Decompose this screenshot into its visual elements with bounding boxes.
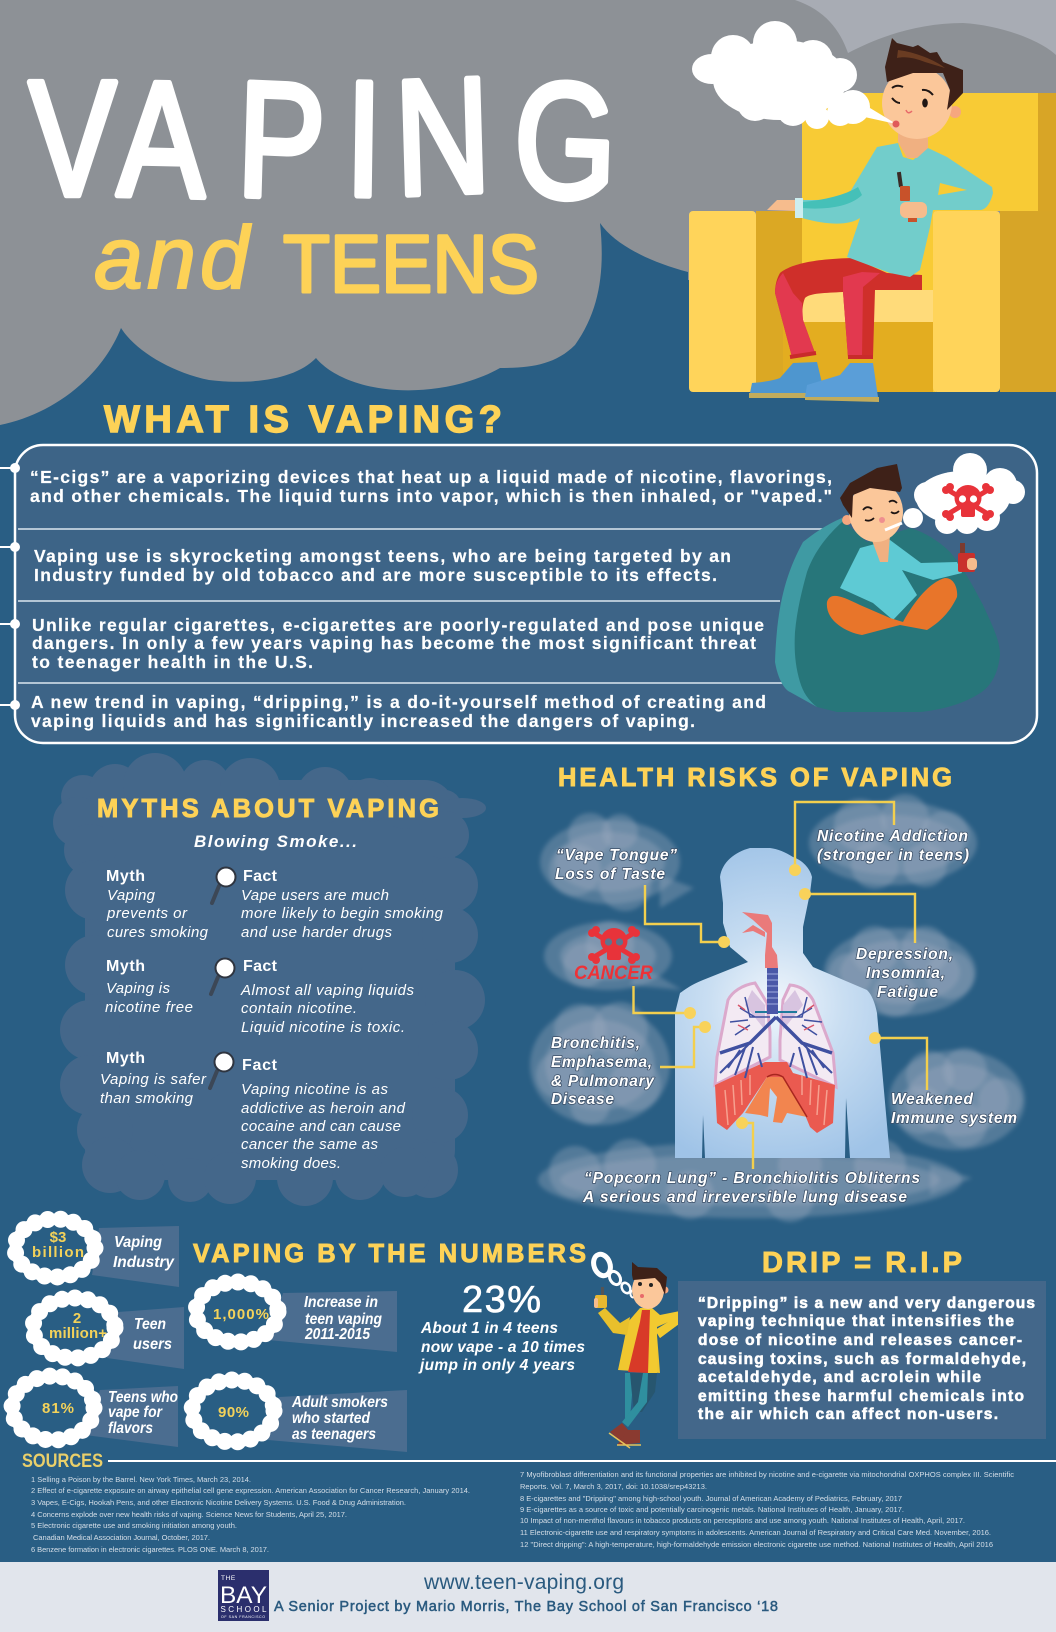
- label: depression: Depression,: [856, 946, 953, 963]
- diaphragm: [715, 1062, 835, 1133]
- myth and fact 2: Myth: [106, 958, 145, 975]
- myth and fact 3: addictive as heroin and: [241, 1100, 406, 1117]
- dripping text: “Dripping” is a new and very dangerous: [698, 1295, 1035, 1312]
- stat: 90 percent: who started: [292, 1410, 370, 1427]
- smoke clouds: [530, 794, 1025, 1222]
- text: poorly regulated: [32, 615, 764, 672]
- label: nicotine addiction: [817, 828, 969, 864]
- sources left column: 6 Benzene formation in electronic cigarettes. PLOS ONE. March 8, 2017.: [31, 1545, 269, 1554]
- stat: 2 million: million+: [49, 1325, 107, 1342]
- text: dripping trend: vaping liquids and has significantly increased the dangers of vaping.: [31, 711, 695, 731]
- label: weakened immune system: Weakened: [891, 1091, 974, 1108]
- myth and fact 3: than smoking: [100, 1090, 194, 1107]
- myth and fact 1: more likely to begin smoking: [241, 905, 444, 922]
- head: [632, 1262, 668, 1309]
- hand and neck: [767, 130, 928, 211]
- human body silhouette: [675, 848, 890, 1158]
- dripping text: [698, 1295, 1035, 1423]
- timeline connectors: [0, 464, 825, 709]
- cloud: weakened: [889, 1048, 1025, 1150]
- icon: magnifier: [210, 1052, 234, 1088]
- credit: A Senior Project by Mario Morris, The Bay School of San Francisco ‘18: [274, 1599, 778, 1615]
- illustration: teen on beanbag: [775, 453, 1025, 712]
- sources right column: 12 "Direct dripping": A high-temperature, high-formaldehyde emission electronic cigarette use method. National Institutes of Health, April 2016: [520, 1540, 993, 1549]
- myth and fact 2: Almost all vaping liquids: [240, 982, 414, 999]
- cloud: vape tongue: [540, 813, 694, 911]
- shoes: [749, 362, 879, 402]
- text: skyrocketing: Vaping use is skyrocketing amongst teens, who are being targeted by an: [34, 546, 731, 566]
- heading: SOURCES: [22, 1451, 103, 1472]
- text: poorly regulated: to teenager health in the U.S.: [32, 652, 313, 672]
- myth and fact 2: Vaping is: [106, 980, 170, 997]
- cloud: cancer: [544, 921, 682, 990]
- text: dripping trend: [31, 692, 766, 731]
- sources left column: 4 Concerns explode over new health risks of vaping. Science News for Students, April 25, 2017.: [31, 1510, 347, 1519]
- sources left column: 1 Selling a Poison by the Barrel. New York Times, March 23, 2014.: [31, 1475, 251, 1484]
- title: and TEENS: TEENS: [283, 219, 539, 310]
- text: skyrocketing: Industry funded by old tobacco and are more susceptible to its effects.: [34, 565, 717, 585]
- myth and fact 3: cocaine and can cause: [241, 1118, 401, 1135]
- label: bronchitis: Disease: [551, 1091, 614, 1108]
- stat: 81 percent: vape for: [108, 1404, 163, 1421]
- stat: 23 percent: jump in only 4 years: [418, 1357, 575, 1374]
- section: drip = r.i.p: [678, 1247, 1046, 1439]
- cloud: popcorn lung: [538, 1139, 972, 1222]
- label: cancer with skull: [574, 926, 653, 984]
- logo: the bay school: BAY: [220, 1582, 267, 1609]
- text panel: [678, 1281, 1046, 1439]
- label: depression: Insomnia,: [866, 965, 945, 982]
- myth and fact 3: Myth: [106, 1050, 145, 1067]
- sources right column: 11 Electronic-cigarette use and respiratory symptoms in adolescents. American Journal of Respiratory and Critical Care Med. November, 2016.: [520, 1528, 991, 1537]
- myth and fact 2: contain nicotine.: [241, 1000, 357, 1017]
- sources left column: 5 Electronic cigarette use and smoking initiation among youth.: [31, 1521, 237, 1530]
- label: bronchitis: [551, 1035, 655, 1108]
- heading: what is vaping: WHAT IS VAPING?: [104, 399, 502, 441]
- stat: 3 billion: billion: [32, 1244, 84, 1261]
- label: cancer with skull: CANCER: [574, 963, 653, 984]
- text: poorly regulated: dangers. In only a few years vaping has become the most significant threat: [32, 633, 756, 653]
- myth and fact 1: Fact: [243, 868, 278, 885]
- footer: [0, 1562, 1056, 1632]
- stat: 81 percent: [12, 1376, 178, 1447]
- heading: MYTHS ABOUT VAPING: [97, 795, 439, 823]
- sources right column: [520, 1470, 1014, 1549]
- myth and fact 3: smoking does.: [241, 1155, 341, 1172]
- cloud: bronchitis: [530, 1002, 670, 1125]
- title: and TEENS: and: [94, 208, 252, 307]
- logo: the bay school: THE: [221, 1575, 236, 1582]
- text: skyrocketing: [34, 546, 731, 585]
- label: depression: Fatigue: [877, 984, 938, 1001]
- sources left column: [31, 1475, 470, 1554]
- stat: 3 billion: [15, 1219, 179, 1287]
- trousers: [622, 1373, 657, 1427]
- icon: magnifier: [212, 868, 236, 903]
- cloud: nicotine: [809, 794, 977, 889]
- myth and fact 3: cancer the same as: [241, 1136, 378, 1153]
- myth and fact 1: Myth: [106, 868, 145, 885]
- myth and fact 3: Vaping nicotine is as: [241, 1081, 388, 1098]
- myth and fact 1: cures smoking: [107, 924, 209, 941]
- subheading: Blowing Smoke...: [194, 832, 357, 851]
- label: weakened immune system: [891, 1091, 1017, 1127]
- label: vape tongue: [555, 847, 677, 883]
- sources right column: 7 Myofibroblast differentiation and its functional properties are inhibited by nicotine and e-cigarette via mitochondrial OXPHOS complex III. Scientific: [520, 1470, 1014, 1479]
- myth and fact 1: Vape users are much: [241, 887, 389, 904]
- dripping text: causing toxins, such as formaldehyde,: [698, 1351, 1026, 1368]
- myth and fact 1: Vaping: [107, 887, 156, 904]
- text: poorly regulated: Unlike regular cigarettes, e-cigarettes are poorly-regulated and pose unique: [32, 615, 764, 635]
- stat: 2 million: 2: [73, 1310, 81, 1327]
- section: sources: [22, 1451, 1056, 1554]
- myth and fact 3: Vaping is safer: [100, 1071, 207, 1088]
- myth and fact 2: Fact: [243, 958, 278, 975]
- sources right column: 8 E-cigarettes and "Dripping" among high-school youth. Journal of American Academy of Pediatrics, February, 2017: [520, 1494, 902, 1503]
- stat: 3 billion: $3: [50, 1229, 66, 1246]
- section: health risks of vaping: [530, 764, 1025, 1222]
- stat: 1000 percent: [196, 1282, 397, 1352]
- illustration: standing teen with vape: [591, 1252, 687, 1448]
- myth and fact 2: [105, 958, 414, 1036]
- cloud: depression: [824, 926, 976, 1017]
- logo: the bay school: [218, 1570, 269, 1621]
- armchair: [689, 93, 1056, 392]
- stat: 1000 percent: 1,000%: [213, 1306, 269, 1323]
- text: dripping trend: A new trend in vaping, “dripping,” is a do-it-yourself method of creating and: [31, 692, 766, 712]
- sources right column: 10 Impact of non-menthol flavours in tobacco products on perceptions and use among youth. National Institutes of Health, April, 2017.: [520, 1516, 965, 1525]
- dripping text: dose of nicotine and releases cancer-: [698, 1332, 1022, 1349]
- heading: DRIP = R.I.P: [762, 1247, 962, 1279]
- sources left column: Canadian Medical Association Journal, October, 2017.: [33, 1533, 210, 1542]
- title: and TEENS: [94, 208, 539, 310]
- heading: HEALTH RISKS OF VAPING: [558, 764, 952, 792]
- label: popcorn lung: “Popcorn Lung” - Bronchiolitis Obliterns: [584, 1170, 920, 1187]
- myth and fact 3: Fact: [242, 1057, 278, 1074]
- website: www.teen-vaping.org: [423, 1571, 624, 1594]
- trousers: [775, 258, 922, 357]
- stat: 1000 percent: teen vaping: [305, 1311, 382, 1328]
- beanbag: [775, 518, 1000, 712]
- stat: 1000 percent: 2011-2015: [304, 1326, 370, 1343]
- sources left column: 3 Vapes, E-Cigs, Hookah Pens, and other Electronic Nicotine Delivery Systems. U.S. Food & Drug Administration.: [31, 1498, 406, 1507]
- sources right column: 9 E-cigarettes as a source of toxic and potentially carcinogenic metals. National Institutes of Health, January, 2017.: [520, 1505, 904, 1514]
- stat: 23 percent: About 1 in 4 teens: [420, 1320, 558, 1337]
- stat: 90 percent: [192, 1380, 407, 1452]
- head: [840, 464, 903, 562]
- vape pen: [897, 172, 927, 222]
- label: weakened immune system: Immune system: [891, 1110, 1017, 1127]
- label: vape tongue: “Vape Tongue”: [556, 847, 677, 864]
- stat: 90 percent: 90%: [218, 1404, 249, 1421]
- crossed legs: [827, 578, 957, 635]
- myth and fact 3: [100, 1050, 406, 1172]
- cloud background: [53, 753, 486, 1206]
- bronchi: [720, 997, 832, 1078]
- stat: 81 percent: flavors: [108, 1420, 153, 1437]
- stat: 3 billion: Industry: [113, 1254, 175, 1271]
- stat: 2 million: users: [133, 1336, 172, 1353]
- label: nicotine addiction: (stronger in teens): [817, 847, 969, 864]
- stat: 23 percent: [418, 1279, 585, 1374]
- text: e-cigs: “E-cigs” are a vaporizing devices that heat up a liquid made of nicotine, flavorings,: [30, 467, 832, 487]
- illustration: teen vaping on armchair: [689, 21, 1056, 402]
- myth and fact 2: nicotine free: [105, 999, 193, 1016]
- header smoke background: [0, 0, 1056, 425]
- shirt: [795, 143, 993, 277]
- stat: 81 percent: Teens who: [108, 1389, 178, 1406]
- label: vape tongue: Loss of Taste: [555, 866, 665, 883]
- dripping text: acetaldehyde, and acrolein while: [698, 1369, 981, 1386]
- sources left column: 2 Effect of e-cigarette exposure on airway epithelial cell gene expression. American Association for Cancer Research, January 2014.: [31, 1486, 470, 1495]
- label: nicotine addiction: Nicotine Addiction: [817, 828, 968, 845]
- label: popcorn lung: [582, 1170, 920, 1206]
- panel: myths about vaping: [53, 753, 486, 1206]
- myth and fact 2: Liquid nicotine is toxic.: [241, 1019, 405, 1036]
- label: depression: [856, 946, 953, 1001]
- stat: 90 percent: Adult smokers: [291, 1394, 388, 1411]
- shoes: [609, 1423, 641, 1448]
- trachea: [742, 912, 778, 1014]
- section: vaping by the numbers: [12, 1219, 586, 1452]
- smoke rings: [591, 1252, 636, 1298]
- dripping text: vaping technique that intensifies the: [698, 1313, 1014, 1330]
- dripping text: the air which can affect non-users.: [698, 1406, 998, 1423]
- stat: 2 million: [33, 1298, 184, 1369]
- icon: magnifier: [211, 958, 234, 994]
- stat: 23 percent: now vape - a 10 times: [421, 1339, 585, 1356]
- stat: 81 percent: 81%: [42, 1400, 74, 1417]
- dripping text: emitting these harmful chemicals into: [698, 1388, 1024, 1405]
- myth and fact 1: [106, 868, 444, 941]
- jacket and shirt: [598, 1308, 687, 1373]
- logo: the bay school: SCHOOL: [220, 1605, 267, 1614]
- logo: the bay school: OF SAN FRANCISCO: [221, 1615, 265, 1619]
- title: VAPING: VAPING: [29, 44, 619, 235]
- vape device: [594, 1287, 607, 1308]
- heading: VAPING BY THE NUMBERS: [193, 1240, 586, 1268]
- lungs: [715, 912, 836, 1133]
- connector lines: [634, 802, 927, 1169]
- label: bronchitis: Bronchitis,: [551, 1035, 640, 1052]
- head: [882, 38, 963, 139]
- stat: 3 billion: Vaping: [114, 1234, 162, 1251]
- label: bronchitis: Emphasema,: [551, 1054, 652, 1071]
- label: popcorn lung: A serious and irreversible lung disease: [582, 1189, 907, 1206]
- stat: 2 million: Teen: [134, 1316, 166, 1333]
- sources right column: Reports. Vol. 7, March 3, 2017, doi: 10.1038/srep43213.: [520, 1482, 707, 1491]
- shirt: [840, 540, 962, 620]
- stat: 23 percent: 23%: [462, 1279, 541, 1321]
- smoke bubble: [692, 21, 893, 129]
- text: e-cigs: and other chemicals. The liquid turns into vapor, which is then inhaled, or "vaped.": [30, 486, 832, 506]
- stat: 1000 percent: Increase in: [304, 1294, 378, 1311]
- myth and fact 1: prevents or: [106, 905, 188, 922]
- myth and fact 1: and use harder drugs: [241, 924, 392, 941]
- vape can: [958, 543, 977, 572]
- label: bronchitis: & Pulmonary: [551, 1073, 655, 1090]
- stat: 90 percent: as teenagers: [292, 1426, 376, 1443]
- text: e-cigs: [30, 467, 832, 506]
- panel: what is vaping: [0, 445, 1056, 1632]
- thought bubble with skull: [903, 453, 1025, 534]
